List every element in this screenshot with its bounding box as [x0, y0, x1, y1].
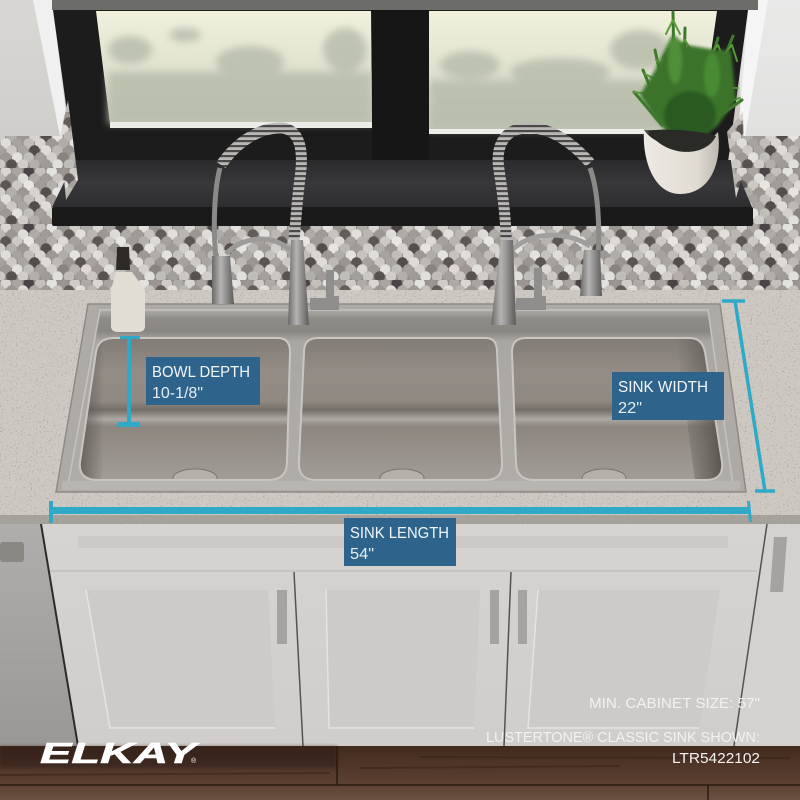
left bowl	[80, 339, 289, 479]
right faucet spout arm	[512, 235, 590, 250]
trees outside window	[108, 28, 699, 130]
foliage mass	[640, 35, 736, 142]
sink width label: SINK WIDTH	[618, 379, 708, 396]
dishwasher panel	[0, 524, 80, 748]
window	[52, 0, 758, 170]
left faucet handle	[310, 270, 339, 310]
middle bowl	[300, 339, 501, 479]
left bowl rim	[80, 338, 290, 480]
callout: bowl depth	[146, 357, 260, 405]
left faucet neck	[214, 168, 220, 258]
right faucet neck	[590, 168, 599, 258]
note: minimum cabinet size: MIN. CABINET SIZE: 57"	[589, 695, 760, 712]
potted plant	[634, 12, 742, 194]
logo registered mark: ®	[191, 757, 197, 765]
sink length label: SINK LENGTH	[350, 525, 449, 542]
logo: Elkay	[40, 738, 200, 770]
cabinet handle 4	[770, 537, 787, 592]
note: sink shown	[486, 729, 760, 767]
right faucet body	[491, 240, 516, 325]
right faucet	[491, 128, 602, 325]
soil	[648, 130, 716, 152]
cabinet edge left	[41, 524, 78, 746]
pot	[644, 130, 719, 194]
left faucet head	[212, 256, 234, 304]
wood floor	[0, 746, 800, 800]
floor plank left dark	[0, 746, 337, 768]
window mullion	[372, 10, 429, 160]
shelf top	[52, 160, 752, 207]
dimension line: sink length	[49, 501, 752, 523]
right faucet head	[580, 250, 602, 296]
window sill shelf	[52, 160, 753, 226]
sink width value: 22"	[618, 400, 642, 417]
wall: right	[740, 0, 800, 136]
callout: sink width	[612, 372, 724, 420]
right bowl rim	[512, 338, 722, 480]
cabinet handle 3	[518, 590, 527, 644]
door seams	[294, 524, 767, 746]
sink	[56, 304, 746, 492]
countertop	[0, 288, 800, 524]
window sill strip: left	[110, 122, 372, 128]
drawer bottom line	[50, 570, 757, 572]
sink front lip	[62, 481, 740, 490]
shelf front edge	[52, 207, 753, 226]
left faucet spout arm	[226, 239, 290, 254]
cabinet	[0, 524, 800, 748]
window glass: right pane	[429, 11, 717, 130]
right bowl	[513, 339, 722, 479]
backsplash: penny tile mosaic	[0, 136, 800, 290]
sink deck	[68, 310, 733, 485]
window frame	[53, 10, 748, 170]
left faucet spring	[221, 128, 301, 240]
soap dispenser	[111, 247, 145, 332]
middle bowl rim	[299, 338, 502, 480]
wall tile corner: left	[60, 100, 78, 200]
bowl depth value: 10-1/8"	[152, 385, 203, 402]
sink outer rim	[56, 304, 746, 492]
door panel right	[528, 590, 720, 728]
window glass: left pane	[96, 11, 372, 124]
foliage	[634, 12, 742, 130]
soap pump	[116, 247, 130, 270]
wall: left	[0, 0, 60, 136]
cabinet side right	[735, 524, 800, 748]
callout: sink length	[344, 518, 456, 566]
counter speckle	[0, 288, 800, 524]
cabinet handle 1	[277, 590, 287, 644]
sink length value: 54"	[350, 546, 374, 563]
blind bar	[52, 0, 758, 10]
floor plank seams	[0, 746, 800, 800]
right faucet spring	[498, 128, 590, 240]
logo: Elkay: ELKAY	[40, 738, 200, 770]
cabinet body	[40, 524, 767, 748]
dishwasher handle	[0, 542, 24, 562]
dimension line: sink width	[722, 301, 775, 491]
counter front edge	[0, 515, 800, 524]
door panel middle	[326, 590, 480, 728]
wall reveal: left white	[33, 0, 68, 136]
cabinet handle 2	[490, 590, 499, 644]
note: sink shown: LUSTERTONE® CLASSIC SINK SHOWN:	[486, 729, 760, 746]
drawer recess	[78, 536, 728, 548]
dimension line: bowl depth	[118, 336, 140, 427]
door panel left	[86, 590, 275, 728]
soap bottle	[111, 272, 145, 332]
note: model number: LTR5422102	[672, 750, 760, 767]
left faucet body	[288, 240, 309, 325]
wall tile corner: right	[727, 112, 744, 198]
bowl depth label: BOWL DEPTH	[152, 364, 250, 381]
window sill strip: right	[429, 129, 644, 134]
floor grain	[0, 757, 790, 775]
wall reveal: right white	[738, 0, 768, 136]
left faucet	[212, 128, 339, 325]
right faucet handle	[516, 268, 546, 310]
